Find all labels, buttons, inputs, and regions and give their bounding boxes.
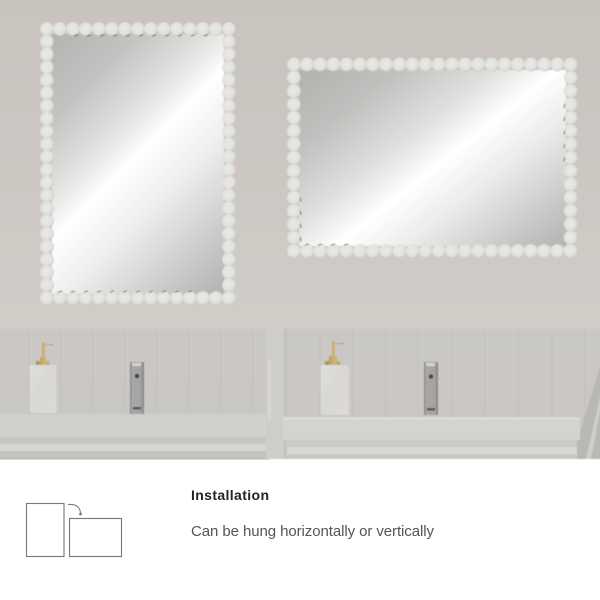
text: installation description: Can be hung horizontally or vertically xyxy=(191,523,434,540)
icon: rotate from portrait to landscape xyxy=(26,504,122,556)
wall xyxy=(266,0,600,330)
towel bar xyxy=(572,366,600,459)
mirror: portrait xyxy=(40,22,236,305)
bead edge shadows: landscape xyxy=(300,104,565,246)
faucet xyxy=(424,362,438,415)
soap dispenser xyxy=(30,342,56,413)
panel: horizontal hanging scene xyxy=(266,0,600,459)
heading: installation: Installation xyxy=(191,487,269,503)
vanity counter xyxy=(283,417,580,459)
bead edge shadows: portrait xyxy=(58,34,208,292)
wall column divider xyxy=(266,320,286,459)
soap dispenser xyxy=(320,341,349,415)
mirror: landscape xyxy=(287,58,578,258)
wall xyxy=(0,0,270,330)
faucet xyxy=(130,362,144,414)
vanity counter xyxy=(0,414,270,460)
beaded frame: portrait xyxy=(40,22,236,305)
panel: vertical hanging scene xyxy=(0,0,270,460)
wainscot panels xyxy=(266,329,600,459)
beaded frame: landscape xyxy=(287,58,578,258)
wainscot panels xyxy=(0,329,270,417)
